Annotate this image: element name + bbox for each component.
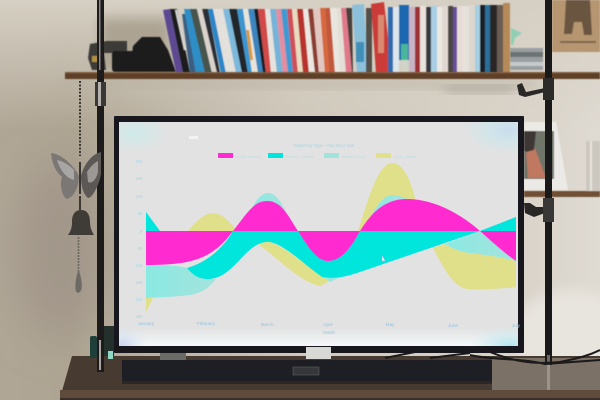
TV stand bbox=[160, 352, 186, 360]
icon: hanging bell bbox=[68, 196, 94, 293]
cables under TV bbox=[385, 350, 600, 364]
y axis labels: 100 bbox=[136, 194, 143, 199]
picture frame behind TV bbox=[524, 122, 568, 190]
y axis labels: 50 bbox=[138, 211, 143, 216]
right lower wooden shelf bbox=[524, 191, 600, 197]
x axis month labels bbox=[138, 321, 521, 328]
x axis month labels: July bbox=[512, 323, 521, 328]
soundbar bbox=[122, 360, 492, 384]
chart legend: Other Visitors bbox=[393, 154, 417, 159]
chart legend: Mobile Visitors bbox=[235, 154, 261, 159]
x axis month labels: May bbox=[386, 322, 395, 327]
top wooden shelf bbox=[65, 72, 600, 79]
y axis labels: 50 bbox=[138, 246, 143, 251]
series: other visitors yellow bbox=[146, 163, 516, 312]
y axis labels bbox=[136, 159, 143, 319]
y axis labels: 250 bbox=[136, 314, 143, 319]
x axis month labels: April bbox=[323, 322, 333, 327]
storage box and green flag on top shelf bbox=[510, 28, 543, 70]
series: desktop visitors cyan bbox=[146, 212, 516, 279]
chart legend bbox=[218, 153, 417, 159]
poster on wall bbox=[552, 0, 600, 52]
x axis month labels: January bbox=[138, 321, 155, 326]
TV screen bbox=[119, 122, 518, 346]
left metal pipe bbox=[95, 0, 106, 372]
series: mobile visitors magenta bbox=[146, 199, 516, 265]
table bbox=[60, 356, 600, 400]
icon: butterfly ornament bbox=[51, 152, 101, 199]
y axis labels: 150 bbox=[136, 176, 143, 181]
chart title: Visitors by Type - Year Over Year bbox=[293, 143, 355, 148]
x axis title: Month bbox=[323, 330, 335, 335]
small device and cables at table left bbox=[90, 326, 114, 359]
glass on right shelf bbox=[586, 141, 600, 191]
chart legend: Desktop Visitors bbox=[285, 154, 314, 159]
y axis labels: 0 bbox=[140, 229, 143, 234]
y axis labels: 200 bbox=[136, 297, 143, 302]
stream chart bbox=[146, 163, 516, 312]
chart legend: Tablet Visitors bbox=[341, 154, 366, 159]
x axis month labels: June bbox=[448, 323, 458, 328]
hanging chain bbox=[79, 81, 81, 156]
white plate under TV bbox=[306, 347, 331, 359]
x axis month labels: February bbox=[197, 321, 216, 326]
x axis month labels: March bbox=[261, 322, 274, 327]
camera on top shelf bbox=[88, 37, 176, 72]
y axis labels: 150 bbox=[136, 280, 143, 285]
series: tablet visitors teal bbox=[146, 193, 516, 298]
icon: mouse cursor bbox=[382, 255, 386, 262]
y axis labels: 200 bbox=[136, 159, 143, 164]
row of DVD cases bbox=[163, 2, 510, 73]
right metal pipe with brackets bbox=[517, 0, 554, 390]
TV bezel bbox=[114, 116, 524, 353]
y axis labels: 100 bbox=[136, 263, 143, 268]
